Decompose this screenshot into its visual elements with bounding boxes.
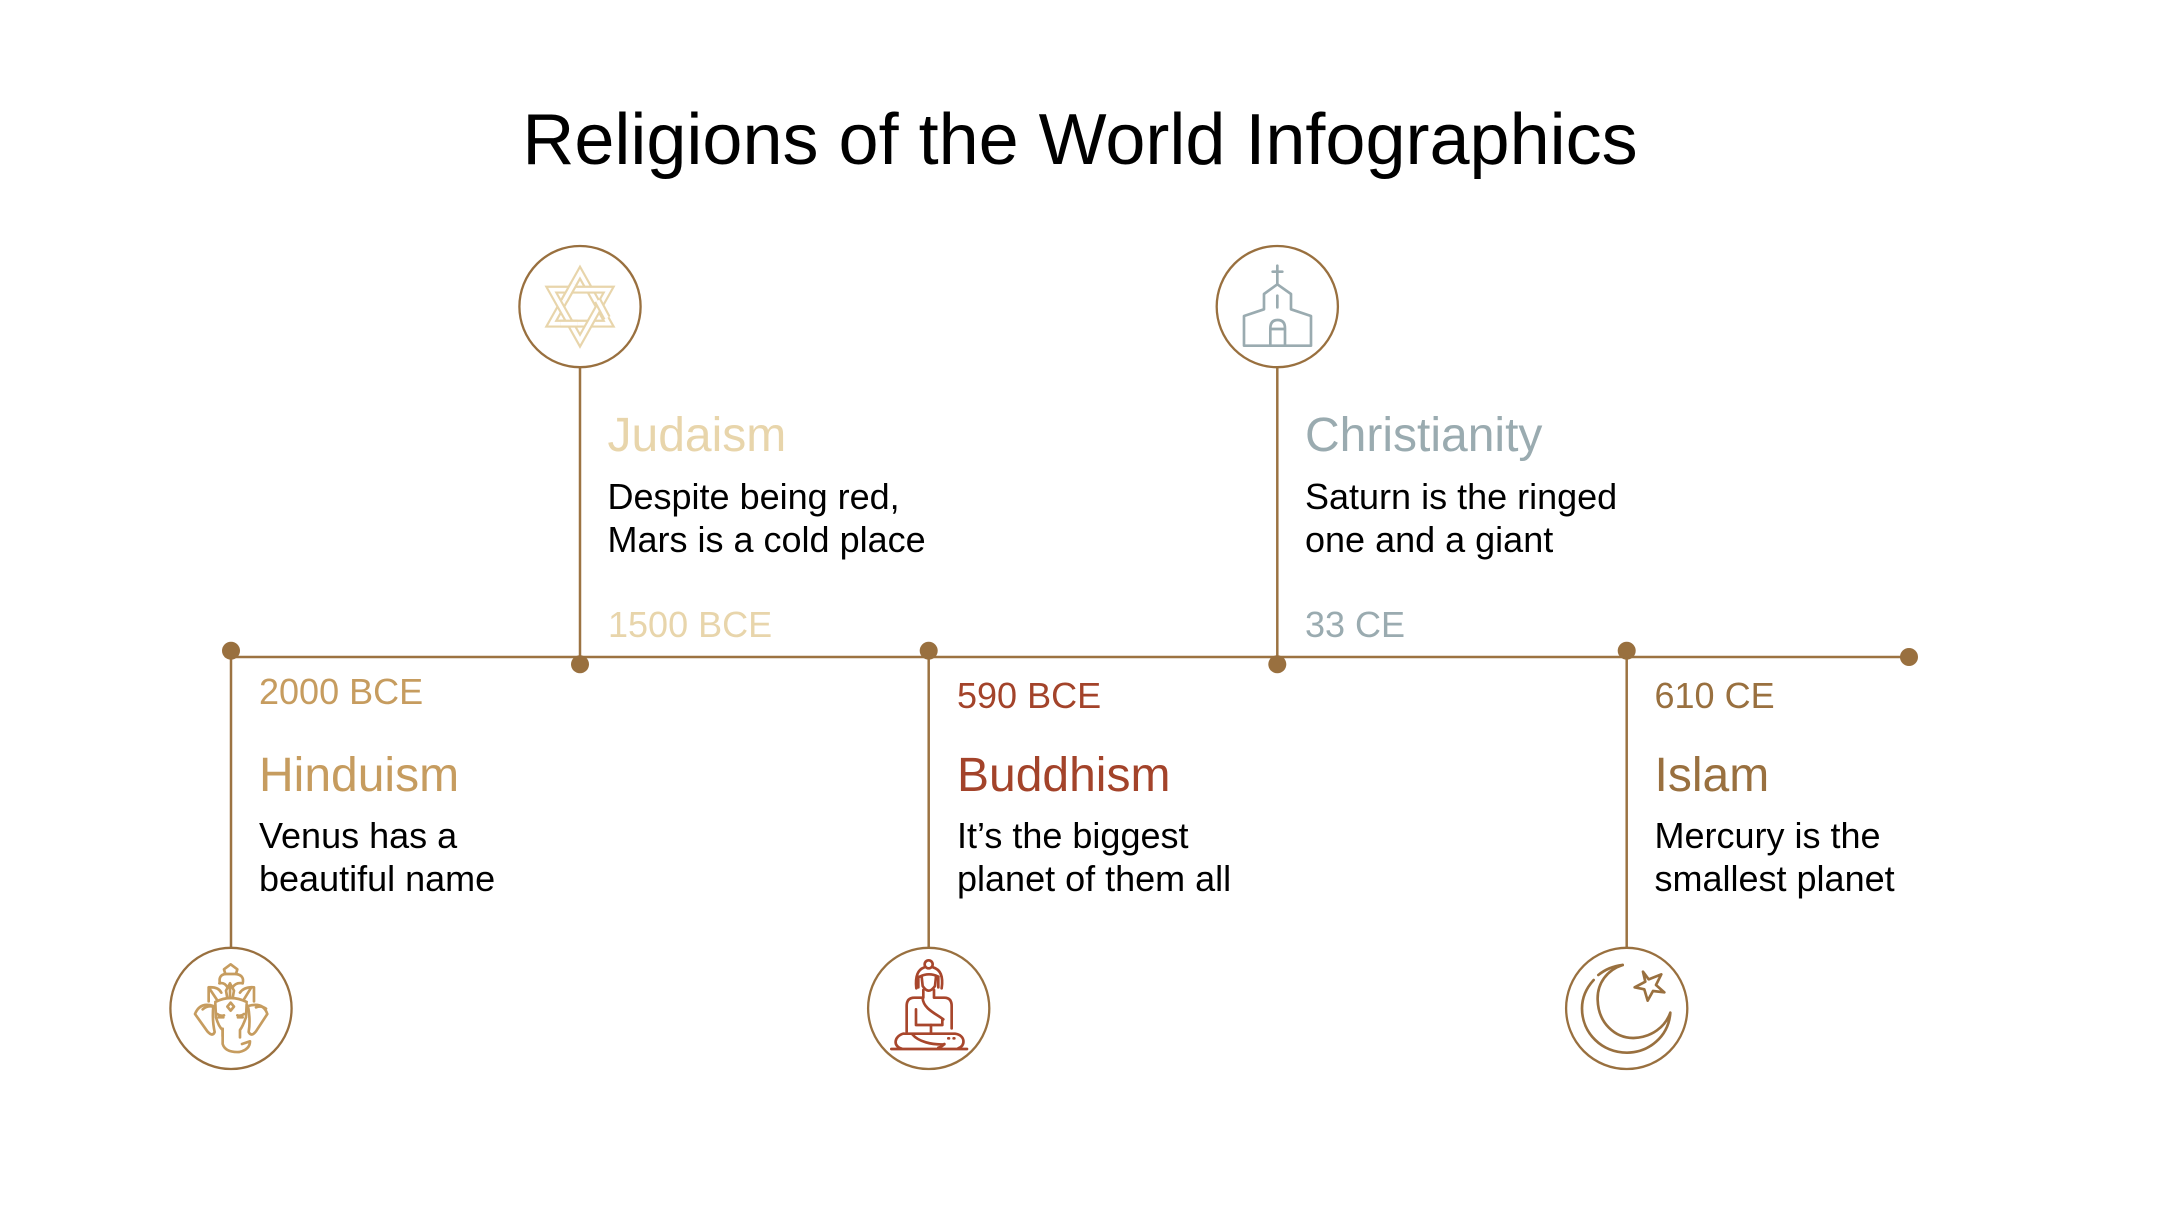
text: Islam description: smallest planet bbox=[1654, 858, 1895, 899]
text: Hinduism description: Venus has a bbox=[259, 815, 458, 856]
date: 590 BCE: 590 BCE bbox=[957, 675, 1101, 716]
text: Hinduism description: beautiful name bbox=[259, 858, 495, 899]
date: 33 CE: 33 CE bbox=[1305, 604, 1405, 645]
timeline axis bbox=[231, 648, 1918, 666]
text: Buddhism description: It’s the biggest bbox=[957, 815, 1188, 856]
connector: Islam bbox=[1618, 642, 1636, 948]
text: Christianity description: one and a giant bbox=[1305, 519, 1553, 560]
text: Islam description: Mercury is the bbox=[1654, 815, 1881, 856]
connector: Christianity bbox=[1268, 367, 1286, 673]
text: Judaism description: Despite being red, bbox=[608, 476, 900, 517]
milestone: Buddhism bbox=[868, 642, 1231, 1069]
milestone: Islam bbox=[1566, 642, 1895, 1069]
connector: Judaism bbox=[571, 367, 589, 673]
heading: Hinduism: Hinduism bbox=[259, 749, 459, 802]
milestone: Hinduism bbox=[170, 642, 495, 1069]
title: Religions of the World Infographics bbox=[522, 100, 1638, 180]
date: 610 CE: 610 CE bbox=[1654, 675, 1775, 716]
icon: crescent and star bbox=[1566, 948, 1687, 1069]
icon: Ganesha bbox=[170, 948, 292, 1069]
text: Buddhism description: planet of them all bbox=[957, 858, 1231, 899]
heading: Islam: Islam bbox=[1654, 749, 1769, 802]
text: Judaism description: Mars is a cold place bbox=[608, 519, 926, 560]
text: Christianity description: Saturn is the ringed bbox=[1305, 476, 1617, 517]
milestone: Christianity bbox=[1217, 246, 1617, 673]
connector: Hinduism bbox=[222, 642, 240, 948]
milestone: Judaism bbox=[519, 246, 926, 673]
date: 2000 BCE: 2000 BCE bbox=[259, 671, 423, 712]
heading: Judaism: Judaism bbox=[608, 409, 786, 462]
date: 1500 BCE: 1500 BCE bbox=[608, 604, 772, 645]
icon: Star of David bbox=[519, 246, 641, 367]
icon: Buddha bbox=[868, 948, 989, 1069]
icon: church bbox=[1217, 246, 1338, 367]
heading: Buddhism: Buddhism bbox=[957, 749, 1170, 802]
connector: Buddhism bbox=[920, 642, 938, 948]
heading: Christianity: Christianity bbox=[1305, 409, 1542, 462]
